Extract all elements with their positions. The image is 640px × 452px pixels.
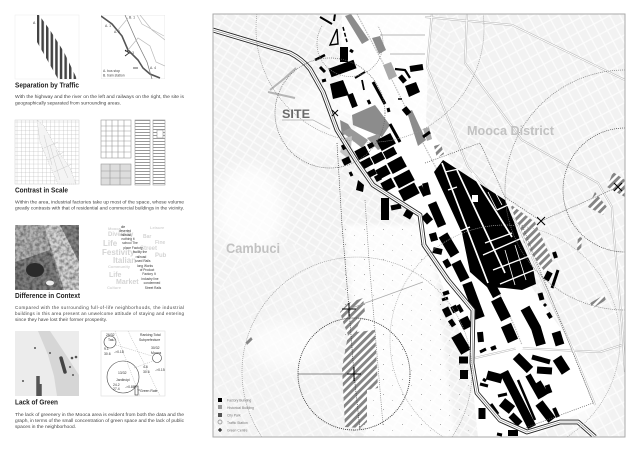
diagram: green ratio circles: 30/32 (151, 346, 160, 350)
text block: graph, in terms of the small concentration of green space and the lack of public (15, 418, 185, 423)
word cloud: Fine (155, 240, 165, 246)
text block (15, 94, 185, 106)
legend: Green Centre (227, 428, 248, 432)
map: green space (15, 331, 79, 396)
word cloud: Life (109, 272, 122, 279)
diagram: green ratio circles: ->0.18 (114, 350, 124, 354)
diagram: traffic map: B. train station (103, 74, 125, 78)
diagram: green ratio circles: Jardinópi (116, 378, 130, 382)
legend (218, 398, 254, 432)
word cloud: factory words: deserted (119, 229, 131, 233)
text block: Within the area, industrial factories take up most of the space, whose volume (15, 200, 185, 204)
diagram: green ratio circles: 30.6 (104, 352, 111, 356)
diagram: green ratio circles: ->0.15 (155, 368, 165, 372)
diagram: green ratio circles: Subprefecture (139, 338, 160, 342)
text block: geographically separated from surrounding areas. (15, 100, 121, 106)
panel: contrast in scale (15, 120, 185, 210)
map: catchment circles (242, 14, 625, 437)
word cloud: factory words: condemned (144, 281, 161, 285)
word cloud: factory words: industry line (141, 277, 159, 281)
diagram: green ratio circles: 24.2 (113, 383, 120, 387)
text block: greatly contrasts with that of residential and commercial buildings in the vicinity. (15, 206, 184, 210)
label: Cambuci: Cambuci (226, 241, 280, 256)
diagram: green ratio circles: Mooca (151, 351, 161, 355)
image: aerial photo (15, 225, 79, 290)
label: Mooca District: Mooca District (467, 123, 555, 138)
map: connection lines (282, 120, 618, 430)
diagram: traffic map: A. 3 (128, 51, 134, 55)
diagram: green ratio circles: 9.1 (104, 347, 109, 351)
map: historical buildings (340, 14, 432, 160)
word cloud: Mooca (108, 226, 121, 231)
diagram: green ratio circles (101, 331, 165, 396)
diagram: green ratio circles: 13/32 (118, 371, 127, 375)
word cloud: factory words: Street Rails (145, 286, 162, 290)
word cloud: Life (103, 239, 118, 248)
word cloud: Culture (107, 285, 122, 290)
map: green centre markers (332, 110, 622, 381)
text block (15, 200, 185, 210)
text block: since they have lost their former prosperity. (15, 317, 107, 322)
heading: Lack of Green (15, 400, 58, 406)
panel: main site map (213, 14, 625, 437)
map border (213, 14, 625, 437)
diagram: green ratio circles: 30.6 (143, 370, 150, 374)
word cloud: Festivity (102, 248, 135, 257)
diagram: green ratio circles: Tatu (108, 338, 115, 342)
grid of factory blocks (354, 133, 420, 202)
label: SITE: SITE (282, 109, 310, 121)
diagram: site band with vertical stripes (15, 15, 79, 79)
word cloud: factory words: Factory It (142, 272, 156, 276)
word cloud (102, 225, 167, 290)
heading: Difference in Context (15, 293, 81, 300)
diagram: green ratio circles: Ranking:Total (140, 333, 161, 337)
diagram: green ratio circles: 4.6 (143, 365, 148, 369)
diagram: green ratio circles: ->0.88 (125, 385, 135, 389)
diagram: traffic map: A. 1 (105, 24, 111, 28)
word cloud: factory words: nothing it (122, 237, 135, 241)
text block: With the highway and the river on the left and railways on the right, the site is (15, 94, 185, 99)
word cloud: factory words: long Works (137, 264, 153, 268)
word cloud: Community (108, 264, 131, 269)
diagram: site band with vertical stripes: A (33, 21, 36, 25)
diagram: traffic map: A. 2 (114, 30, 120, 34)
text block: spaces in the neighborhood. (15, 424, 76, 429)
diagram: traffic map (101, 15, 165, 79)
legend: Factory Building (227, 398, 251, 402)
diagram: scale grid (15, 120, 79, 184)
diagram: building footprints (101, 120, 165, 185)
diagram: traffic map: A. bus stop (103, 69, 120, 73)
word cloud: factory words (119, 225, 162, 290)
map: roads (268, 14, 625, 405)
text block: buildings in this area present an unwelcome attitude of staying and entering (15, 311, 184, 316)
map: railway corridor (352, 14, 522, 350)
diagram: traffic map: B. 1 (129, 16, 135, 20)
text block: Compared with the surrounding full-of-life neighborhoods, the industrial (15, 305, 184, 310)
diagram: green ratio circles: 26/32 (106, 333, 115, 337)
word cloud: factory words: of Product (140, 268, 154, 272)
legend: Historical Building (227, 406, 254, 410)
word cloud: factory words: die (121, 225, 125, 229)
panel: difference in context (15, 225, 184, 322)
word cloud: Street (140, 246, 157, 252)
word cloud: Pub (155, 253, 167, 259)
diagram: green ratio circles: Green Rate (140, 389, 158, 393)
heading: Separation by Traffic (15, 82, 79, 90)
map: hatched green centres (245, 144, 625, 428)
word cloud: Diversity (108, 232, 134, 238)
word cloud: Bar (143, 234, 151, 240)
legend: Traffic Station (227, 421, 248, 425)
word cloud: factory words: place Factory (123, 246, 143, 250)
word cloud: factory words: used Rails (136, 259, 151, 263)
legend: City Park (227, 414, 241, 418)
map: street cuts in factory blocks (442, 163, 534, 285)
text block: The lack of greenery in the Mooca area is evident from both the data and the (15, 412, 185, 417)
diagram: green ratio circles: 27.4 (113, 387, 120, 391)
map: highway (213, 30, 595, 437)
text block (15, 305, 184, 322)
word cloud: Market (116, 279, 139, 286)
word cloud: factory words: school The (122, 241, 138, 245)
map: factory buildings (315, 14, 566, 435)
word cloud: factory words: facility the (133, 250, 147, 254)
word cloud: factory words: railroad (136, 255, 147, 259)
map frame and neighborhood blocks (213, 14, 625, 437)
word cloud: Leisure (150, 225, 165, 230)
word cloud: Italian (113, 256, 136, 265)
word cloud: factory words: railroad (121, 233, 132, 237)
heading: Contrast in Scale (15, 188, 68, 194)
panel: lack of green (15, 331, 185, 429)
panel: separation by traffic (15, 15, 185, 106)
diagram: traffic map: A. 4 (150, 66, 156, 70)
text block (15, 412, 185, 429)
